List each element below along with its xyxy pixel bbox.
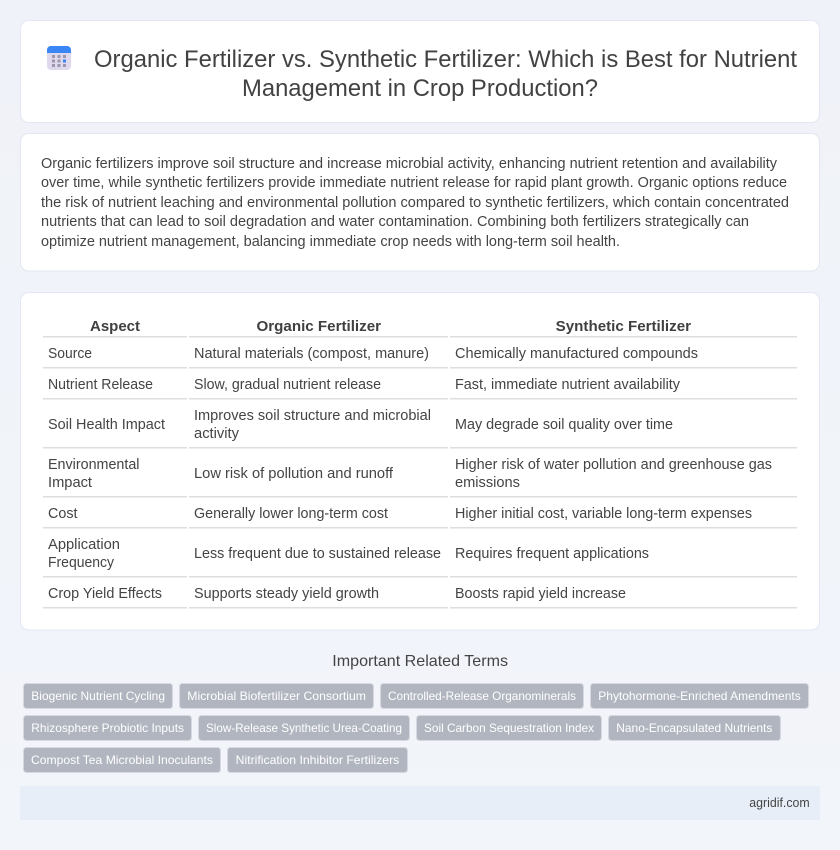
tag: controlled-release organominerals: Controlled-Release Organominerals	[388, 689, 576, 703]
panel: introduction	[20, 134, 820, 271]
tag: nitrification inhibitor fertilizers: Nitrification Inhibitor Fertilizers	[236, 753, 399, 767]
panel: comparison table	[20, 292, 820, 630]
tag: microbial biofertilizer consortium: Microbial Biofertilizer Consortium	[187, 689, 366, 703]
table row: source	[43, 346, 797, 368]
tag: biogenic nutrient cycling	[24, 684, 172, 708]
table header row	[43, 319, 797, 338]
table row: nutrient release: Slow, gradual nutrient release	[194, 377, 381, 393]
tag: slow-release synthetic urea-coating	[198, 716, 410, 740]
table row: soil health impact: Soil Health Impact	[48, 417, 165, 433]
tag: rhizosphere probiotic inputs	[24, 716, 192, 740]
table row: soil health impact: activity	[194, 426, 240, 442]
table row: cost: Higher initial cost, variable long-term expenses	[455, 506, 752, 522]
tag group: related terms	[24, 684, 808, 772]
table header row: Organic Fertilizer	[256, 319, 381, 335]
panel: title header	[20, 20, 820, 122]
table row: application frequency: Frequency	[48, 555, 115, 571]
tag: microbial biofertilizer consortium	[180, 684, 374, 708]
tag: phytohormone-enriched amendments: Phytohormone-Enriched Amendments	[598, 689, 801, 703]
table row: crop yield effects: Crop Yield Effects	[48, 586, 162, 602]
text block: summary paragraph: over time, while synthetic fertilizers provide immediate nutrient release for rapid plant growth. Organic options reduce	[41, 175, 787, 191]
table row: environmental impact	[43, 457, 797, 498]
table row: application frequency: Application	[48, 537, 120, 553]
table row: environmental impact: Higher risk of water pollution and greenhouse gas	[455, 457, 772, 473]
table row: environmental impact: Low risk of pollution and runoff	[194, 466, 394, 482]
icon: calendar	[47, 46, 71, 70]
tag: rhizosphere probiotic inputs: Rhizosphere Probiotic Inputs	[31, 721, 184, 735]
tag: soil carbon sequestration index: Soil Carbon Sequestration Index	[424, 721, 594, 735]
text block: summary paragraph: the risk of nutrient leaching and environmental pollution compared to synthetic fertilizers, which contain concentrated	[41, 195, 789, 211]
tag: soil carbon sequestration index	[416, 716, 602, 740]
table row: soil health impact: May degrade soil quality over time	[455, 417, 673, 433]
heading: important related terms: Important Related Terms	[332, 653, 508, 670]
table row: crop yield effects: Boosts rapid yield increase	[455, 586, 626, 602]
table row: environmental impact: emissions	[455, 475, 520, 491]
table row: cost: Generally lower long-term cost	[194, 506, 388, 522]
table row: environmental impact: Impact	[48, 475, 92, 491]
footer bar	[20, 786, 820, 820]
tag: slow-release synthetic urea-coating: Slow-Release Synthetic Urea-Coating	[206, 721, 402, 735]
table row: nutrient release: Nutrient Release	[48, 377, 153, 393]
table row: cost	[43, 506, 797, 528]
table row: soil health impact: Improves soil structure and microbial	[194, 408, 431, 424]
table row: source: Chemically manufactured compounds	[455, 346, 698, 362]
tag: compost tea microbial inoculants	[24, 748, 220, 772]
tag: controlled-release organominerals	[380, 684, 584, 708]
table row: cost: Cost	[48, 506, 78, 522]
text block: summary paragraph	[41, 156, 789, 250]
tag: compost tea microbial inoculants: Compost Tea Microbial Inoculants	[31, 753, 213, 767]
table row: application frequency: Requires frequent applications	[455, 546, 649, 562]
tag: nano-encapsulated nutrients	[608, 716, 780, 740]
text block: summary paragraph: nutrients that can lead to soil degradation and water contamination. Combining both fertilizers strategically can	[41, 214, 749, 230]
title: Management in Crop Production?	[242, 75, 598, 102]
table row: crop yield effects: Supports steady yield growth	[194, 586, 379, 602]
table row: soil health impact	[43, 408, 797, 448]
table row: nutrient release: Fast, immediate nutrient availability	[455, 377, 681, 393]
tag: phytohormone-enriched amendments	[590, 684, 808, 708]
title: Organic Fertilizer vs. Synthetic Fertilizer: Which is Best for Nutrient	[94, 46, 797, 73]
table row: source: Natural materials (compost, manure)	[194, 346, 429, 362]
table row: source: Source	[48, 346, 92, 362]
footer source text: agridif.com	[749, 795, 810, 810]
title	[94, 46, 797, 102]
table header row: Synthetic Fertilizer	[556, 319, 691, 335]
table row: crop yield effects	[43, 586, 797, 608]
tag: nano-encapsulated nutrients: Nano-Encapsulated Nutrients	[616, 721, 772, 735]
table row: application frequency: Less frequent due to sustained release	[194, 546, 441, 562]
tag: nitrification inhibitor fertilizers	[228, 748, 408, 772]
tag: biogenic nutrient cycling: Biogenic Nutrient Cycling	[31, 689, 165, 703]
text block: summary paragraph: optimize nutrient management, balancing immediate crop needs with long-term soil health.	[41, 234, 620, 250]
table row: environmental impact: Environmental	[48, 457, 140, 473]
table row: nutrient release	[43, 377, 797, 400]
text block: summary paragraph: Organic fertilizers improve soil structure and increase microbial activity, enhancing nutrient retention and availability	[41, 156, 778, 172]
table row: application frequency	[43, 537, 797, 578]
table header row: Aspect	[90, 319, 140, 335]
